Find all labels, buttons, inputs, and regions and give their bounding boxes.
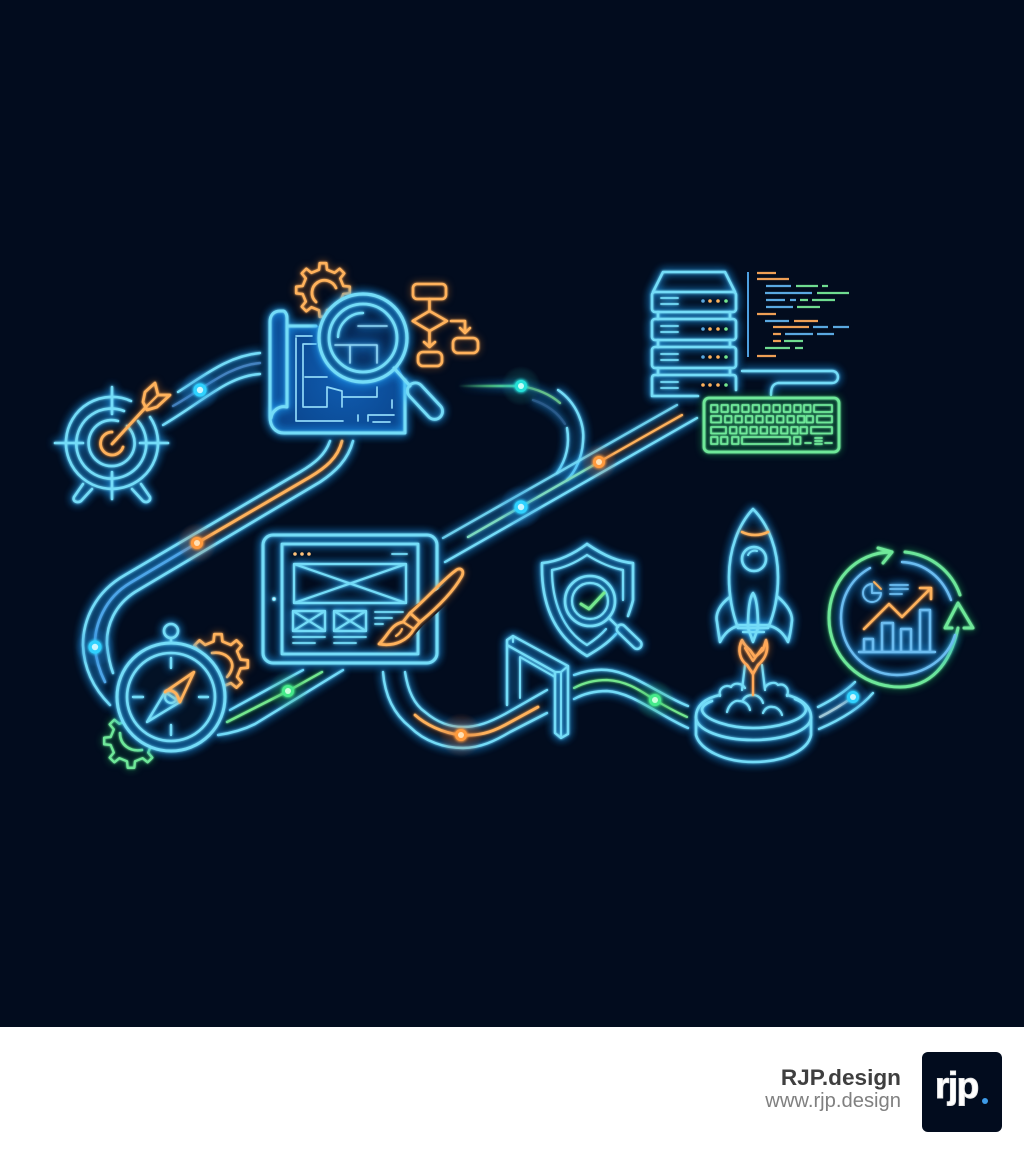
cable bbox=[742, 371, 838, 395]
path: gate to rocket green core bbox=[574, 680, 687, 717]
orange trend line bbox=[864, 588, 931, 629]
blueprint sheet bbox=[270, 311, 405, 433]
path: compass to tablet bbox=[218, 670, 343, 735]
magnifier lens fill bbox=[329, 304, 397, 372]
magnifier handle knockout bbox=[404, 380, 446, 423]
shield magnifier bbox=[565, 576, 643, 651]
rocket knockout bbox=[729, 509, 778, 628]
logo: rjp bbox=[935, 1065, 979, 1106]
path: blueprint to compass bbox=[83, 441, 353, 705]
magnifier lens knockout bbox=[319, 294, 407, 382]
icon: gate bracket bbox=[507, 636, 568, 738]
node cyan right bbox=[837, 681, 869, 713]
node green lower bbox=[268, 671, 308, 711]
launch pad bbox=[696, 665, 811, 762]
path: tablet to gate orange core bbox=[415, 707, 538, 735]
logo bbox=[922, 1052, 1002, 1132]
glowing nodes bbox=[75, 366, 869, 757]
path: tablet to gate bbox=[383, 672, 547, 748]
rocket flame bbox=[740, 640, 767, 695]
icon: server rack bbox=[652, 272, 736, 396]
green gear bbox=[104, 714, 158, 768]
icon: rocket launch bbox=[696, 509, 811, 762]
connector paths bbox=[83, 353, 873, 748]
shield bbox=[542, 544, 633, 656]
icon: compass with gears bbox=[104, 624, 248, 768]
rocket body bbox=[717, 509, 792, 642]
icon: keyboard bbox=[704, 398, 839, 452]
icon: analytics cycle bbox=[829, 548, 973, 687]
brand text: www.rjp.design bbox=[765, 1090, 901, 1112]
path: orange diagonal core bbox=[599, 415, 682, 462]
node cyan far left bbox=[75, 627, 115, 667]
node cyan diagonal bbox=[499, 485, 543, 529]
paintbrush bbox=[379, 569, 463, 645]
node green right bbox=[635, 680, 675, 720]
path: target to blueprint bbox=[163, 353, 260, 425]
code lines bbox=[748, 272, 849, 357]
compass body bbox=[117, 624, 225, 751]
brand text: RJP.design bbox=[781, 1065, 901, 1090]
footer band bbox=[0, 1027, 1024, 1154]
node orange lower bbox=[439, 713, 483, 757]
flowchart bbox=[413, 284, 478, 366]
green cycle arrows bbox=[829, 548, 973, 687]
path: blueprint to compass orange core bbox=[197, 441, 342, 543]
path: compass to tablet green core bbox=[227, 672, 322, 722]
tablet bbox=[263, 535, 437, 663]
icon: shield with magnifier bbox=[542, 544, 643, 656]
compass needle bbox=[165, 672, 194, 702]
target rings bbox=[55, 387, 168, 502]
node orange diagonal bbox=[581, 444, 617, 480]
path: rocket to analytics bbox=[818, 682, 873, 729]
path: flowchart to diagonal bbox=[458, 386, 583, 480]
icon: target with arrow bbox=[55, 383, 170, 502]
magnifying glass bbox=[319, 294, 446, 423]
brand text bbox=[765, 1065, 901, 1112]
gear bbox=[296, 263, 350, 317]
wireframe dots bbox=[293, 552, 311, 556]
check mark bbox=[581, 593, 604, 609]
nose band bbox=[742, 532, 768, 535]
path: gate to rocket bbox=[574, 670, 688, 728]
node teal top bbox=[501, 366, 541, 406]
blue inner arcs bbox=[841, 562, 955, 675]
compass knockout bbox=[117, 643, 225, 751]
brush knockout bbox=[404, 580, 460, 640]
icon: blueprint, gear, magnifier and flowchart bbox=[270, 263, 478, 433]
path: diagonal toward server bbox=[443, 405, 697, 562]
orange gear bbox=[188, 634, 248, 694]
floor plan lines bbox=[296, 336, 394, 422]
node orange bbox=[177, 523, 217, 563]
blueprint outline bbox=[270, 311, 405, 433]
arrow and bullseye bbox=[101, 383, 170, 455]
node cyan left bbox=[180, 370, 220, 410]
icon: tablet wireframe with paintbrush bbox=[263, 535, 463, 663]
server status lights bbox=[701, 299, 728, 387]
